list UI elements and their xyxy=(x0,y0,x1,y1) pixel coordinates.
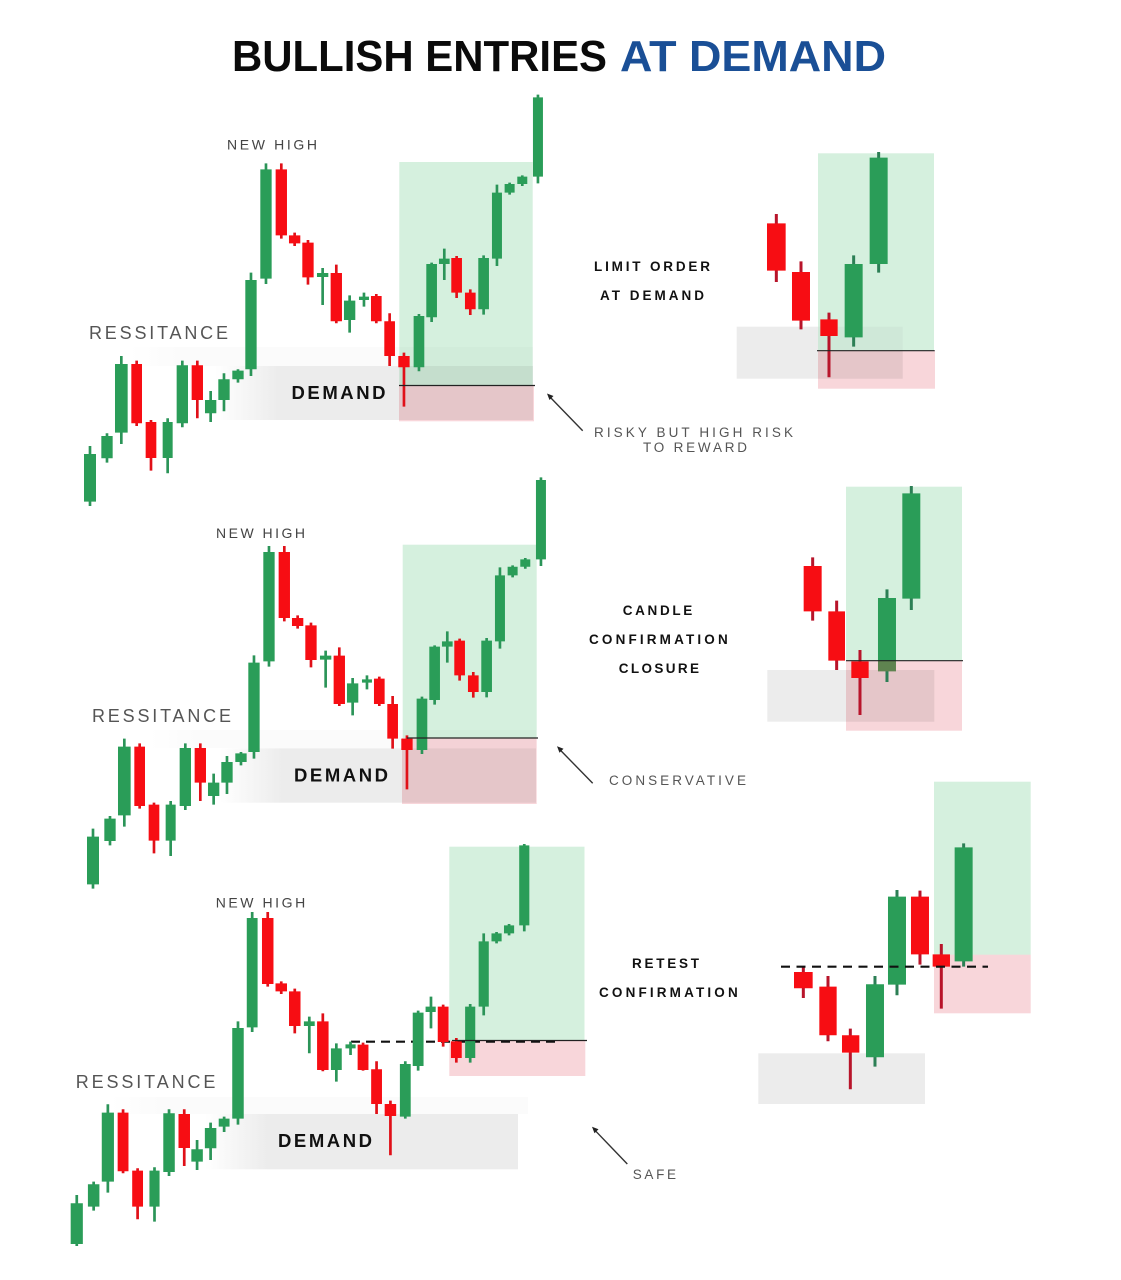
panel: retest main chart xyxy=(71,844,587,1246)
panel: retest heading: RETEST xyxy=(632,956,700,971)
mini candlesticks xyxy=(804,486,920,715)
mini candlesticks xyxy=(767,152,888,377)
label: resistance: RESSITANCE xyxy=(89,323,228,343)
label: resistance: RESSITANCE xyxy=(92,706,231,726)
dashed retest level xyxy=(351,1041,557,1043)
label: demand: DEMAND xyxy=(294,765,388,786)
dashed retest level xyxy=(781,966,988,968)
panel: limit order heading: AT DEMAND xyxy=(600,288,704,303)
mini risk zone xyxy=(934,955,1031,1013)
note: risky but high risk to reward: TO REWARD xyxy=(643,440,747,455)
panel: limit order heading: LIMIT ORDER xyxy=(594,259,710,274)
title: AT DEMAND xyxy=(620,32,886,81)
title xyxy=(232,32,886,81)
panel: candle confirmation heading xyxy=(589,603,728,676)
mini risk zone xyxy=(818,351,935,389)
label: new high: NEW HIGH xyxy=(227,136,317,152)
mini risk zone xyxy=(846,661,962,731)
mini profit zone xyxy=(818,153,934,351)
note: conservative: CONSERVATIVE xyxy=(609,773,746,788)
panel: candle confirmation heading: CANDLE xyxy=(623,603,692,618)
note: risky but high risk to reward: RISKY BUT HIGH RISK xyxy=(594,425,793,440)
panel: retest heading xyxy=(599,956,738,1000)
mini candlesticks xyxy=(794,843,973,1089)
label: new high: NEW HIGH xyxy=(216,525,305,541)
note: risky but high risk to reward xyxy=(594,425,793,455)
arrow: risky note xyxy=(547,394,583,431)
panel: retest heading: CONFIRMATION xyxy=(599,985,738,1000)
title: BULLISH ENTRIES xyxy=(232,32,607,81)
entry line xyxy=(407,737,538,739)
candlesticks xyxy=(71,844,529,1246)
candlesticks xyxy=(87,477,546,889)
panel: retest mini chart xyxy=(758,782,1031,1104)
mini demand zone xyxy=(767,670,934,722)
mini profit zone xyxy=(934,782,1031,955)
label: demand: DEMAND xyxy=(292,382,386,403)
profit zone xyxy=(399,162,533,385)
panel: candle confirmation mini chart xyxy=(767,486,963,731)
label: new high: NEW HIGH xyxy=(216,895,305,911)
label: demand: DEMAND xyxy=(278,1130,372,1151)
demand zone xyxy=(220,748,536,803)
panel: limit order main chart xyxy=(84,95,543,506)
panel: candle confirmation heading: CLOSURE xyxy=(619,661,699,676)
candlesticks xyxy=(84,95,543,506)
profit zone xyxy=(403,545,537,738)
mini demand zone xyxy=(758,1053,925,1104)
panel: candle confirmation heading: CONFIRMATION xyxy=(589,632,728,647)
risk zone xyxy=(402,738,537,804)
entry line xyxy=(452,1040,587,1042)
panel: limit order mini chart xyxy=(737,152,935,389)
mini profit zone xyxy=(846,487,962,661)
arrow: conservative note xyxy=(557,746,593,783)
panel: candle confirmation main chart xyxy=(87,477,546,889)
panel: limit order heading xyxy=(594,259,710,303)
profit zone xyxy=(449,847,584,1041)
note: safe: SAFE xyxy=(633,1167,676,1182)
risk zone xyxy=(449,1041,585,1076)
mini demand zone xyxy=(737,327,903,379)
demand zone xyxy=(205,1114,518,1169)
risk zone xyxy=(399,385,534,421)
label: resistance: RESSITANCE xyxy=(76,1072,215,1092)
arrow: safe note xyxy=(592,1127,627,1164)
entry line xyxy=(399,384,535,386)
demand zone xyxy=(215,366,533,420)
